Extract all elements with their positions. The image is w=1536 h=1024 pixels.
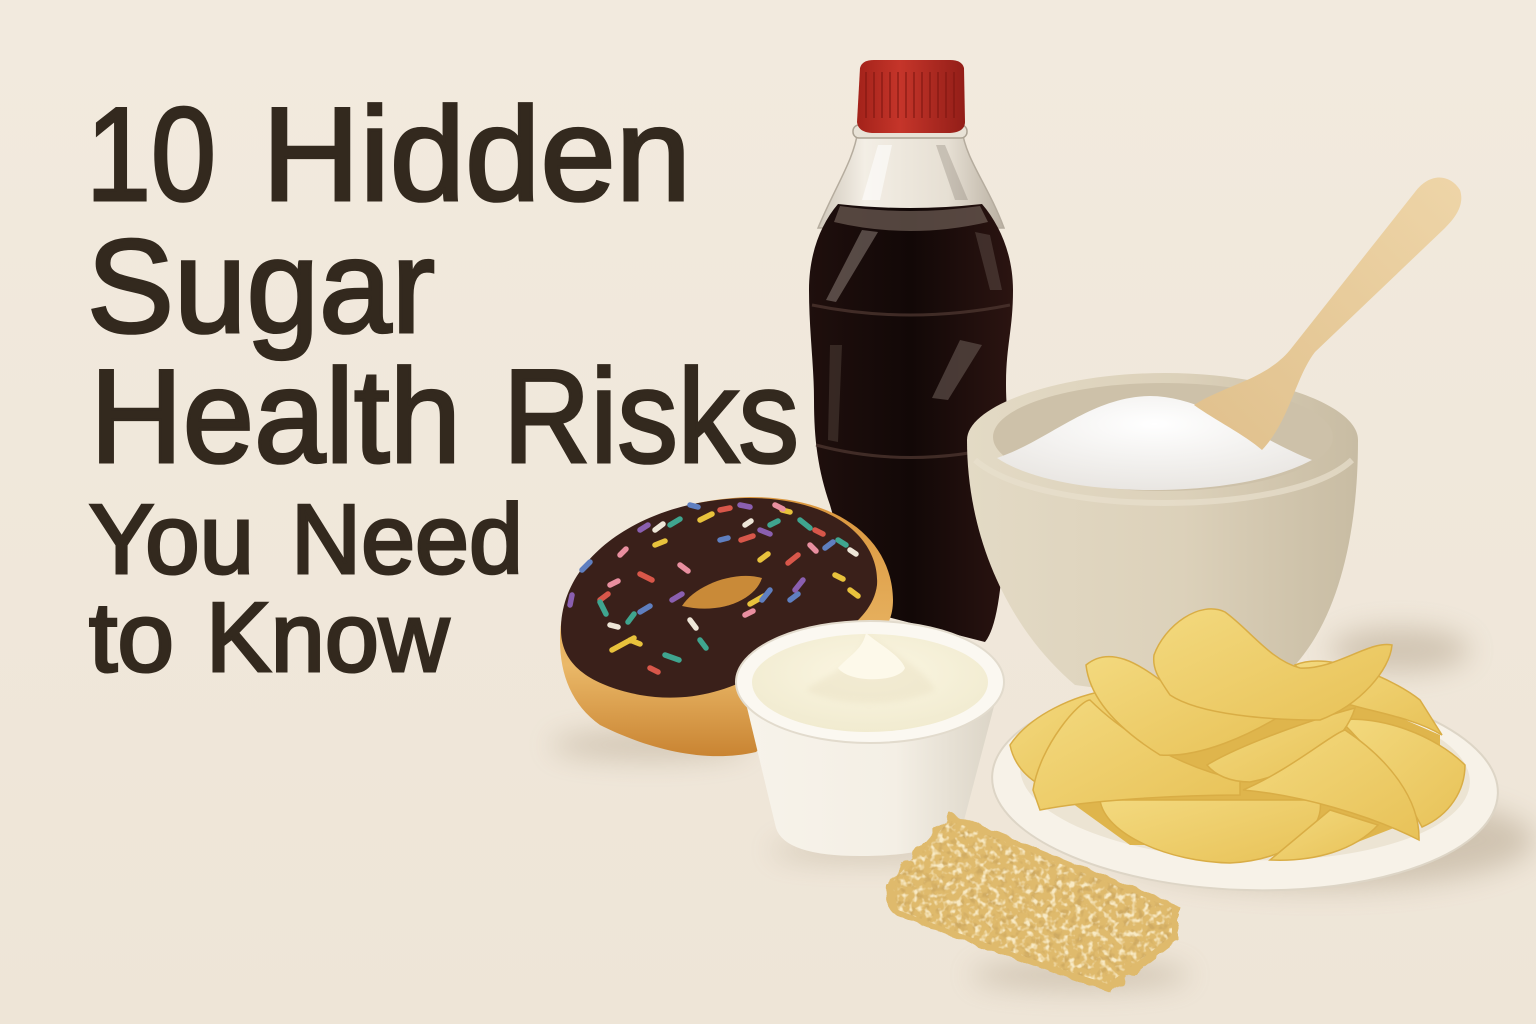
bottle neck ring <box>853 125 967 138</box>
icon: chocolate donut <box>560 497 893 756</box>
bar shape <box>886 813 1178 992</box>
bar texture <box>892 820 1172 984</box>
icon: sugar bowl <box>967 178 1461 695</box>
bottle shoulder clear plastic <box>818 130 1004 228</box>
cola surface and reflections <box>834 206 988 231</box>
title: 10 <box>86 81 216 229</box>
title: to <box>89 582 174 692</box>
chip mass <box>1040 670 1440 845</box>
bowl body <box>967 373 1358 695</box>
bowl inner wall <box>993 383 1333 491</box>
shoulder reflections <box>862 145 892 200</box>
soft shadows <box>550 628 1535 989</box>
title: Know <box>206 582 450 692</box>
front rim highlight <box>975 460 1352 503</box>
icon: yogurt cup <box>736 621 1004 856</box>
icon: plate of chips <box>988 609 1502 899</box>
bottle cap <box>857 60 965 133</box>
chips <box>1010 609 1465 863</box>
cap ridges <box>866 72 954 118</box>
title: You <box>89 484 254 594</box>
cup rim <box>736 621 1004 743</box>
wooden spoon <box>1194 178 1461 450</box>
title <box>86 81 799 692</box>
title: Need <box>291 484 523 594</box>
yogurt swirl <box>806 634 935 704</box>
chocolate icing <box>561 498 877 698</box>
title: Hidden <box>262 81 691 229</box>
title: Health <box>90 343 461 491</box>
yogurt <box>752 634 988 732</box>
inner plate shade <box>1017 682 1473 868</box>
icon: granola bar <box>886 813 1178 992</box>
sprinkles <box>570 505 858 672</box>
cola body <box>809 204 1013 642</box>
dough <box>560 497 893 756</box>
cup body <box>744 695 997 856</box>
plate <box>988 671 1502 899</box>
icon: cola bottle <box>809 60 1013 642</box>
donut hole <box>682 576 762 609</box>
sugar <box>997 396 1312 490</box>
title: Risks <box>503 343 799 491</box>
title: Sugar <box>87 213 435 361</box>
bottle ribs <box>812 305 1010 458</box>
